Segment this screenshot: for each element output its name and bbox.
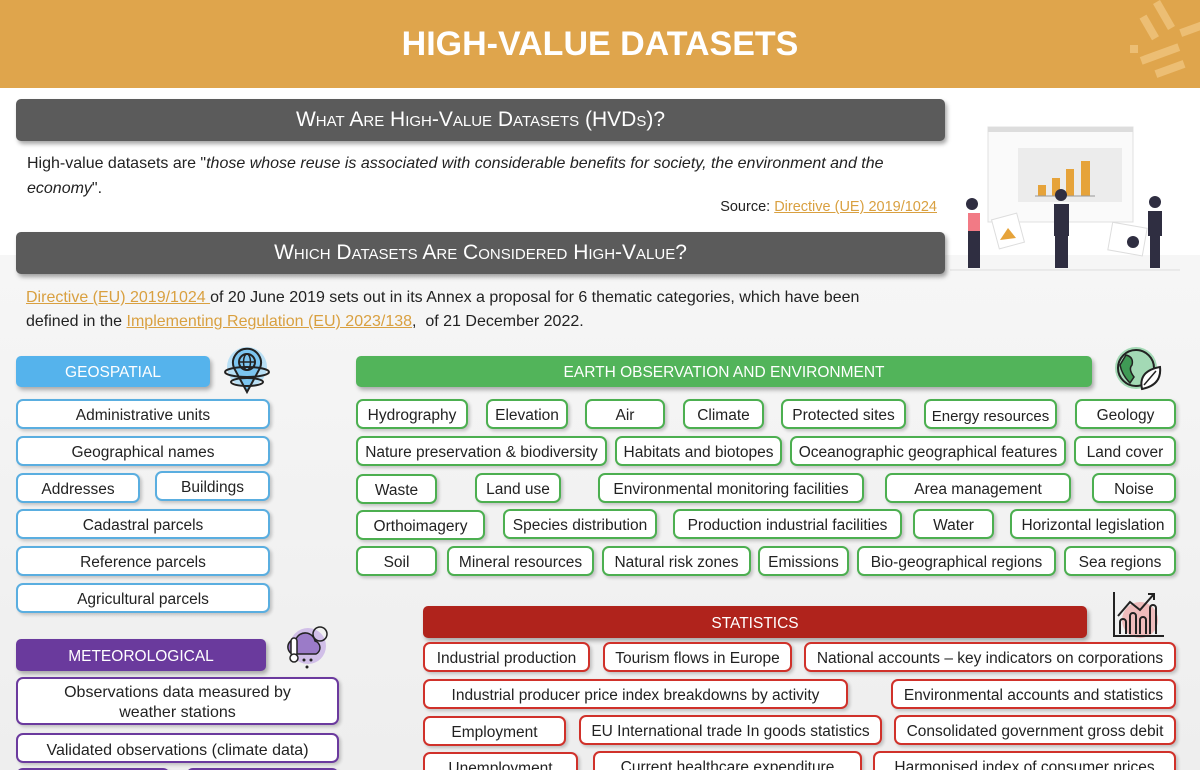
panel: meteorological: weather stations [119, 704, 236, 720]
earth observation header: EARTH OBSERVATION AND ENVIRONMENT [564, 364, 884, 381]
panel: earth observation and environment: Environmental monitoring facilities [613, 481, 849, 498]
section bar: what are HVDs [16, 99, 945, 141]
panel: earth observation and environment: Elevation [495, 407, 559, 424]
panel: statistics: Environmental accounts and statistics [904, 687, 1163, 704]
icon: bar chart with arrow [1113, 592, 1164, 638]
section bar: what are HVDs: What Are High-Value Datasets (HVDs)? [296, 108, 665, 131]
panel: earth observation and environment: Emissions [768, 554, 839, 571]
panel: geospatial [16, 347, 274, 616]
panel: earth observation and environment [356, 347, 1180, 580]
panel: earth observation and environment: Natural risk zones [614, 554, 739, 571]
panel: earth observation and environment: Noise [1114, 481, 1154, 498]
panel: meteorological [16, 626, 342, 770]
geospatial header: GEOSPATIAL [65, 364, 161, 381]
panel: statistics: Industrial producer price index breakdowns by activity [452, 687, 819, 704]
panel: geospatial: Reference parcels [80, 554, 206, 571]
panel: earth observation and environment: Nature preservation & biodiversity [365, 444, 598, 461]
panel: earth observation and environment: Sea regions [1079, 554, 1161, 571]
panel: earth observation and environment: Species distribution [513, 517, 647, 534]
meteorological header [16, 639, 266, 671]
panel: earth observation and environment: Land cover [1087, 444, 1163, 461]
icon: weather [287, 626, 328, 668]
panel: earth observation and environment: Production industrial facilities [688, 517, 887, 534]
panel: earth observation and environment: Orthoimagery [374, 518, 467, 535]
meteorological header: METEOROLOGICAL [68, 648, 214, 664]
panel: earth observation and environment: Protected sites [792, 407, 895, 424]
panel: earth observation and environment: Land use [486, 481, 550, 498]
panel: statistics: Tourism flows in Europe [615, 650, 780, 667]
panel: earth observation and environment: Air [616, 407, 634, 424]
panel: earth observation and environment: Mineral resources [459, 554, 582, 571]
icon: globe pin [224, 347, 270, 394]
icon: earth with leaf [1115, 347, 1162, 390]
header banner: HIGH-VALUE DATASETS [402, 24, 798, 62]
intro paragraph: Directive (EU) 2019/1024 of 20 June 2019 sets out in its Annex a proposal for 6 thematic categories, which have been defined in the Implementing Regulation (EU) 2023/138, of 21 December 2022. [26, 289, 859, 330]
statistics header: STATISTICS [711, 614, 799, 632]
panel: earth observation and environment: Oceanographic geographical features [799, 444, 1057, 461]
panel: earth observation and environment: Soil [384, 554, 409, 571]
panel: earth observation and environment: Horizontal legislation [1021, 517, 1165, 534]
panel: geospatial: Cadastral parcels [83, 517, 203, 534]
header banner [0, 0, 1200, 88]
source: Source: Directive (UE) 2019/1024 [720, 199, 937, 215]
panel: statistics: Employment [451, 724, 538, 741]
panel: earth observation and environment: Energy resources [932, 408, 1049, 424]
panel: statistics: EU International trade In goods statistics [591, 723, 870, 740]
geospatial header [16, 356, 210, 387]
statistics header [423, 606, 1087, 638]
panel: earth observation and environment: Bio-geographical regions [871, 554, 1042, 571]
panel: geospatial: Agricultural parcels [77, 591, 209, 608]
section bar: which datasets: Which Datasets Are Considered High-Value? [274, 241, 687, 264]
panel: meteorological: Observations data measured by [64, 684, 291, 701]
panel: geospatial: Addresses [41, 481, 115, 498]
panel: meteorological: Validated observations (climate data) [46, 742, 309, 759]
panel: earth observation and environment: Area management [914, 481, 1042, 498]
panel: statistics: Industrial production [437, 650, 576, 667]
earth observation header [356, 356, 1092, 387]
definition text: High-value datasets are "those whose reuse is associated with considerable benefits for society, the environment and the economy". [27, 155, 884, 197]
panel: earth observation and environment: Hydrography [368, 407, 456, 424]
panel: geospatial: Administrative units [76, 407, 210, 424]
panel: statistics [422, 592, 1180, 770]
panel: earth observation and environment: Climate [697, 407, 750, 424]
panel: geospatial: Geographical names [71, 444, 215, 461]
section bar: which datasets [16, 232, 945, 274]
panel: earth observation and environment: Water [933, 517, 974, 534]
panel: statistics: National accounts – key indicators on corporations [817, 650, 1163, 667]
panel: earth observation and environment: Habitats and biotopes [624, 444, 773, 461]
panel: earth observation and environment: Geology [1097, 407, 1154, 424]
panel: statistics: Consolidated government gross debit [907, 723, 1163, 740]
panel: earth observation and environment: Waste [375, 482, 418, 499]
illustration [950, 126, 1180, 270]
panel: geospatial: Buildings [181, 479, 244, 496]
